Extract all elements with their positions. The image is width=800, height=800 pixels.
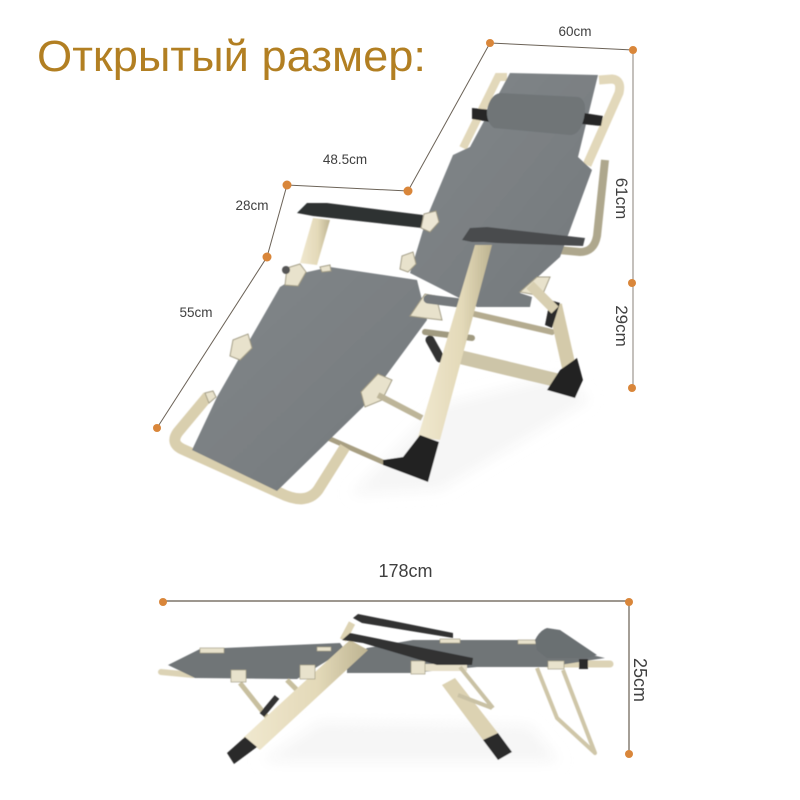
right arm rest: [462, 227, 585, 246]
front foot: [383, 435, 439, 482]
floor shadow: [260, 722, 560, 762]
back support tube: [548, 160, 605, 252]
dimension labels: 178cm: [378, 561, 433, 581]
first foot: [227, 737, 257, 764]
adjuster strut: [378, 395, 422, 418]
back support legs: [537, 668, 595, 753]
arm post: [343, 623, 352, 640]
second foot: [483, 733, 512, 760]
main front leg: [418, 245, 492, 440]
top chair: reclined perspective view: [175, 73, 620, 499]
dimension labels: [179, 24, 650, 702]
rear frame tube: [547, 660, 610, 668]
dimension dots: [153, 39, 637, 758]
title: Открытый размер:: [37, 32, 426, 81]
leg frame tube: [175, 396, 345, 499]
dimension labels: 60cm: [558, 24, 592, 39]
left arm rest: [297, 203, 423, 228]
dimension labels: 48.5cm: [323, 152, 367, 167]
dimension labels: 28cm: [235, 198, 269, 213]
second leg: [442, 678, 498, 740]
pillow strap: [579, 659, 588, 669]
dimension labels: 29cm: [612, 305, 631, 347]
lower armrest: [342, 633, 473, 665]
pillow: [535, 628, 597, 658]
left arm post: [300, 218, 330, 265]
hinge knob: [282, 266, 290, 274]
dimension labels: 55cm: [179, 305, 213, 320]
bottom chair: side view: [161, 614, 610, 764]
leg fabric panel: [192, 267, 427, 491]
struts under seat: [240, 680, 297, 717]
fabric leg panel: [168, 643, 345, 679]
dimension lines: [157, 43, 633, 753]
rear cross bars and legs: [328, 305, 570, 463]
back fabric panel: [410, 73, 598, 307]
headrest straps: [472, 108, 492, 122]
rear foot: [547, 358, 583, 398]
clips: [200, 639, 564, 682]
arm bracket: [421, 211, 439, 232]
hinge struts: [458, 667, 493, 708]
dimension labels: 25cm: [630, 658, 650, 702]
headrest pillow: [487, 93, 585, 135]
back frame: [463, 77, 507, 148]
fabric clips: [205, 252, 550, 407]
upper armrest: [353, 614, 453, 638]
first front leg: [243, 640, 368, 750]
floor shadow: [350, 375, 590, 495]
rear hinge black piece: [545, 300, 560, 328]
fabric rear panel: [347, 640, 605, 673]
dimension labels: 61cm: [612, 178, 631, 219]
front frame tube: [161, 672, 193, 675]
hinge bar: [417, 664, 467, 671]
